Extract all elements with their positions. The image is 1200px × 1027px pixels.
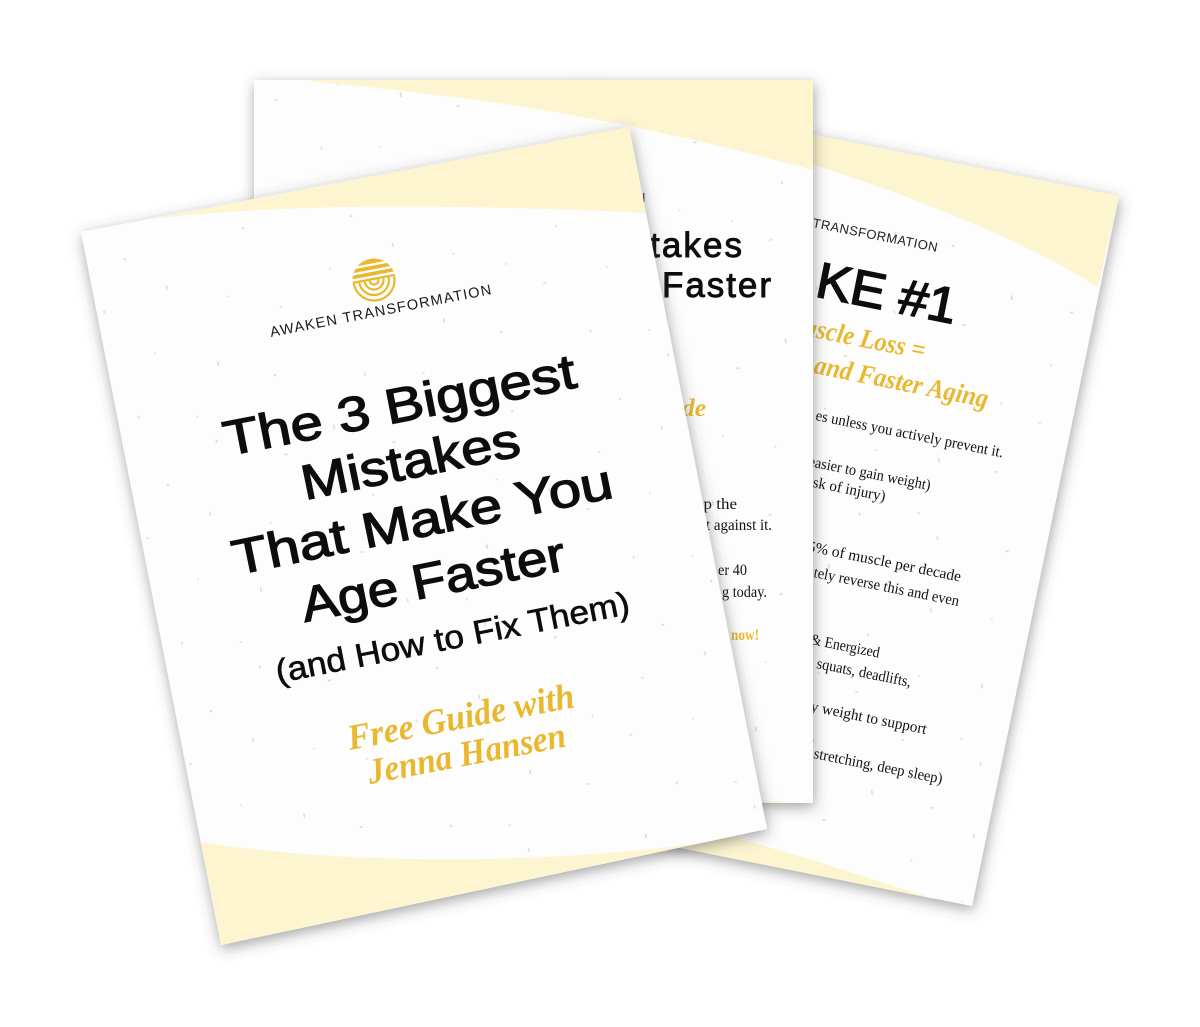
gold byline: Jenna Hansen [363,715,569,792]
icon: Awaken Transformation logo [352,258,396,302]
middle page body text [695,496,772,601]
right page body text: tely reverse this and even [812,564,961,610]
middle page speckle texture [254,80,813,803]
front page top yellow corner [150,127,646,219]
subtitle: (and How to Fix Them) [272,584,633,690]
middle page brand fragment: N [636,190,645,205]
gold byline: Free Guide with [343,675,577,758]
front page sheet [81,127,767,945]
title: Age Faster [297,527,570,633]
right page body text: squats, deadlifts, [815,655,913,691]
title: The 3 Biggest [219,345,581,467]
middle page gold subheading: de [682,395,706,422]
right page top yellow corner [700,112,1119,287]
title: That Make You [227,455,617,586]
right page bottom yellow wedge [650,820,935,899]
right page brand text: TRANSFORMATION [811,215,939,255]
middle page top yellow corner [310,80,813,170]
middle page body text: er 40 [718,562,747,579]
right page speckle texture [435,88,1119,906]
right page body text: es unless you actively prevent it. [814,407,1005,461]
middle page heading [650,226,771,305]
front page bottom yellow corner [201,842,700,945]
right page gold subheading: and Faster Aging [812,349,991,414]
right page heading: KE #1 [812,252,962,335]
middle page sheet [254,80,813,803]
middle page body text: t against it. [706,517,772,534]
front page speckle texture [81,127,767,945]
right page sheet [435,88,1119,906]
middle page heading: Faster [662,266,771,305]
right page body text: 5% of muscle per decade [806,538,963,586]
title [219,345,617,633]
middle page body text: g today. [722,584,767,601]
right page body text: isk of injury) [807,473,887,505]
middle page bottom yellow sliver [740,801,790,803]
right page body text: y weight to support [809,698,929,738]
middle page gold call to action: now! [731,627,759,644]
panel: right page, mistake 1 [435,88,1119,906]
panel: middle page, introduction [254,80,813,803]
right page gold subheading: uscle Loss = [801,311,928,365]
middle page heading: takes [650,226,742,265]
right page body text [806,407,1005,788]
title: Mistakes [296,413,525,511]
right page gold subheading [801,311,991,414]
brand name: AWAKEN TRANSFORMATION [269,282,493,341]
middle page body text: up the [695,496,737,513]
infographic: three overlapping guide pages [76,75,1126,956]
right page body text: stretching, deep sleep) [812,745,944,788]
gold byline [343,675,577,792]
panel: front cover page [81,127,767,945]
right page body text: easier to gain weight) [807,453,932,494]
right page body text: & Energized [809,631,881,662]
